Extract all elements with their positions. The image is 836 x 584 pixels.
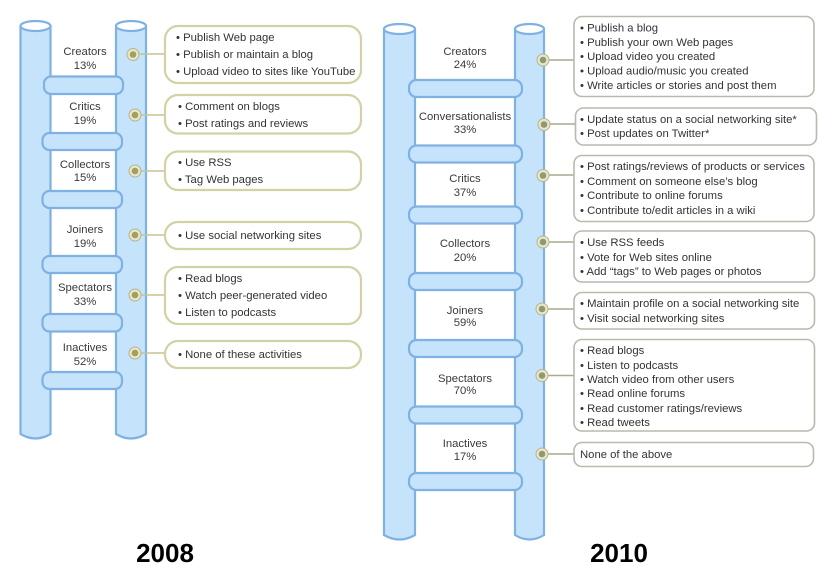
panel: joiners 2008: • Use social networking sites [178,230,322,242]
panel: creators 2010: • Upload video you created [580,51,715,63]
right rail 2010 [515,24,544,540]
panel: critics 2010 [574,156,814,222]
panel: inactives 2008: • None of these activities [178,349,302,361]
rung labels 2008: Collectors [60,159,110,171]
panel: creators 2008: • Publish Web page [176,32,275,44]
rung labels 2008: Creators [63,46,107,58]
rung labels 2008: Joiners [67,224,104,236]
panel: spectators 2010: • Watch video from other users [580,374,735,386]
rung labels 2010: Inactives [443,438,488,450]
panel: creators 2008: • Publish or maintain a blog [176,49,313,61]
connectors 2010 [536,54,575,460]
panel: inactives 2008 [165,341,361,368]
rung labels 2010: Critics [449,173,481,185]
panel: joiners 2010: • Maintain profile on a social networking site [580,298,799,310]
panel: spectators 2008: • Listen to podcasts [178,307,277,319]
panel: collectors 2010: • Vote for Web sites online [580,252,712,264]
panel: critics 2008 [165,95,361,134]
panel: collectors 2010: • Use RSS feeds [580,237,665,249]
panel: spectators 2010: • Read customer ratings/reviews [580,403,743,415]
rung labels 2008: 19% [74,115,96,127]
rung labels 2010: 17% [454,451,476,463]
panel: critics 2008: • Comment on blogs [178,101,280,113]
rung labels 2008: Critics [69,101,101,113]
panel: collectors 2008: • Use RSS [178,157,232,169]
panel: critics 2008: • Post ratings and reviews [178,118,309,130]
rung labels 2010: 70% [454,385,476,397]
rung labels 2008: Spectators [58,282,112,294]
panel: inactives 2010: None of the above [580,449,672,461]
panel: spectators 2008: • Read blogs [178,273,243,285]
rung labels 2010: 33% [454,124,476,136]
panel: critics 2010: • Contribute to/edit articles in a wiki [580,205,755,217]
panel: spectators 2008 [165,267,361,324]
rung labels 2010: Collectors [440,238,490,250]
rungs 2010 [409,80,522,490]
panel: critics 2010: • Contribute to online forums [580,190,723,202]
rung labels 2010 [419,46,511,463]
ladder 2010 [384,16,816,540]
year label 2010: 2010 [590,538,648,568]
rung labels 2010: 20% [454,252,476,264]
panel: creators 2010: • Upload audio/music you created [580,66,748,78]
panel: creators 2008 [165,26,361,83]
rung labels 2010: Spectators [438,373,492,385]
rung labels 2008: Inactives [63,342,108,354]
panel: creators 2010: • Publish your own Web pages [580,37,734,49]
panel: inactives 2010 [574,442,814,466]
rung labels 2008: 13% [74,60,96,72]
panel: joiners 2010 [574,292,814,329]
panel: conversationalists 2010: • Post updates on Twitter* [580,128,710,140]
panel: collectors 2010: • Add “tags” to Web pages or photos [580,266,762,278]
panel: collectors 2010 [574,231,814,282]
rung labels 2008 [58,46,112,368]
rungs 2008 [42,76,123,389]
connectors 2008 [127,48,165,359]
rung labels 2008: 15% [74,172,96,184]
rung labels 2010: Conversationalists [419,111,511,123]
panel: creators 2010 [574,16,814,96]
panel: critics 2010: • Comment on someone else’s blog [580,176,758,188]
left rail 2008 [20,21,50,438]
panel: conversationalists 2010: • Update status on a social networking site* [580,114,797,126]
panel: joiners 2010: • Visit social networking sites [580,313,725,325]
panel: spectators 2010: • Read online forums [580,388,685,400]
panel: spectators 2008: • Watch peer-generated video [178,290,327,302]
rung labels 2010: Joiners [447,305,484,317]
rung labels 2010: 37% [454,187,476,199]
rung labels 2010: Creators [443,46,487,58]
rung labels 2008: 33% [74,296,96,308]
panel: critics 2010: • Post ratings/reviews of products or services [580,161,805,173]
panel: creators 2008: • Upload video to sites like YouTube [176,66,355,78]
panel: spectators 2010 [574,340,814,431]
right rail 2008 [116,21,146,438]
panel: creators 2010: • Write articles or stories and post them [580,80,776,92]
rung labels 2010: 24% [454,59,476,71]
panel: spectators 2010: • Listen to podcasts [580,360,679,372]
panel: spectators 2010: • Read blogs [580,345,645,357]
left rail 2010 [384,24,415,540]
rung labels 2008: 19% [74,238,96,250]
panel: creators 2010: • Publish a blog [580,22,658,34]
panel: conversationalists 2010 [576,108,816,145]
ladder 2008 [20,21,361,438]
panel: joiners 2008 [165,222,361,249]
panel: collectors 2008 [165,152,361,190]
rung labels 2008: 52% [74,356,96,368]
panel: spectators 2010: • Read tweets [580,417,650,429]
panel: collectors 2008: • Tag Web pages [178,174,264,186]
year label 2008: 2008 [136,538,194,568]
rung labels 2010: 59% [454,317,476,329]
